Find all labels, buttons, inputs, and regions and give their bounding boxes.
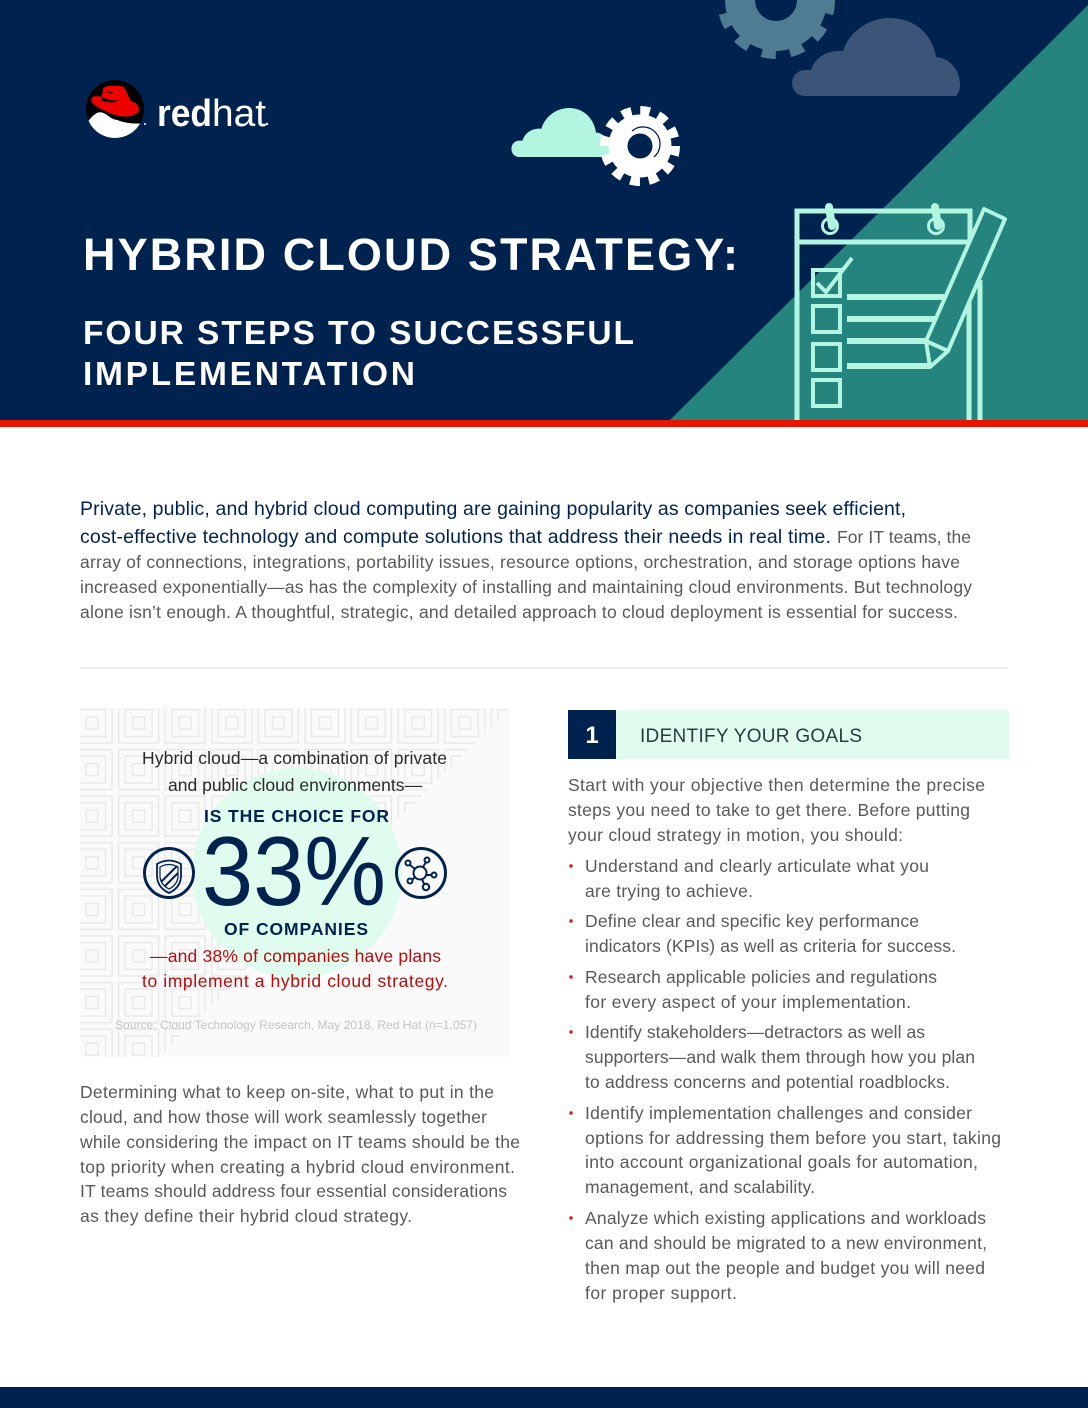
title: HYBRID CLOUD STRATEGY: xyxy=(83,229,738,280)
step 1 bullet list: for proper support. xyxy=(585,1283,737,1303)
header panel xyxy=(0,0,1088,427)
step 1 bullet list: then map out the people and budget you will need xyxy=(585,1258,985,1278)
big number: 33% xyxy=(202,816,386,926)
step 1 bullet list: management, and scalability. xyxy=(585,1177,815,1197)
logo: Red Hat xyxy=(83,80,268,143)
subtitle: IMPLEMENTATION xyxy=(83,356,415,393)
stat label bottom: OF COMPANIES xyxy=(224,919,368,939)
step 1 bullet list: Research applicable policies and regulations xyxy=(585,967,937,987)
red stat text: —and 38% of companies have plans xyxy=(150,946,441,966)
text: left column paragraph: Determining what to keep on-site, what to put in the xyxy=(80,1082,494,1102)
intro paragraph: array of connections, integrations, portability issues, resource options, orchestration, and storage options have xyxy=(80,552,960,572)
red stat text: to implement a hybrid cloud strategy. xyxy=(142,971,448,991)
step 1 bullet list: to address concerns and potential roadblocks. xyxy=(585,1072,950,1092)
panel: 33% statistic xyxy=(80,708,510,1057)
intro paragraph: Private, public, and hybrid cloud computing are gaining popularity as companies seek efficient, xyxy=(80,498,906,520)
step 1 bullet list: Identify implementation challenges and consider xyxy=(585,1103,972,1123)
intro paragraph xyxy=(80,498,972,622)
text: left column paragraph: top priority when creating a hybrid cloud environment. xyxy=(80,1157,515,1177)
text: left column paragraph: as they define their hybrid cloud strategy. xyxy=(80,1206,412,1226)
step 1 bullet list: into account organizational goals for automation, xyxy=(585,1152,978,1172)
icon: shadowman xyxy=(86,80,144,138)
step 1 intro text: steps you need to take to get there. Before putting xyxy=(568,800,970,820)
step 1 bullet list: Define clear and specific key performance xyxy=(585,911,919,931)
teal diagonal triangle xyxy=(670,5,1088,420)
intro paragraph: increased exponentially—as has the complexity of installing and maintaining cloud environments. But technology xyxy=(80,577,972,597)
step 1 bullet list xyxy=(569,856,1001,1303)
icon: white gear xyxy=(606,112,674,180)
text: left column paragraph: while considering the impact on IT teams should be the xyxy=(79,1132,520,1152)
step 1 bullet list: supporters—and walk them through how you plan xyxy=(585,1047,975,1067)
icon: faded gear xyxy=(726,0,826,50)
intro paragraph: For IT teams, the xyxy=(837,527,971,547)
step 1 heading: 1 xyxy=(585,722,599,749)
step 1 intro text xyxy=(568,775,985,845)
text: left column paragraph: cloud, and how those will work seamlessly together xyxy=(80,1107,487,1127)
icon: mint cloud xyxy=(511,108,610,157)
mint circle xyxy=(192,768,402,978)
stat lead-in text: Hybrid cloud—a combination of private xyxy=(142,748,447,768)
stat label top: IS THE CHOICE FOR xyxy=(204,806,389,826)
step 1 bullet list: Identify stakeholders—detractors as well as xyxy=(585,1022,925,1042)
footer bar xyxy=(0,1387,1088,1408)
step 1 intro text: Start with your objective then determine the precise xyxy=(568,775,985,795)
source: Source: Cloud Technology Research, May 2018, Red Hat (n=1,057) xyxy=(115,1018,477,1032)
text: left column paragraph xyxy=(79,1082,520,1226)
icon: checklist with pencil xyxy=(797,207,1005,420)
step 1 heading: IDENTIFY YOUR GOALS xyxy=(640,726,862,747)
step 1 bullet list: Analyze which existing applications and workloads xyxy=(585,1208,986,1228)
subtitle xyxy=(83,315,634,393)
icon: network hub xyxy=(396,848,446,898)
step 1 bullet list: options for addressing them before you start, taking xyxy=(585,1128,1001,1148)
intro paragraph: cost-effective technology and compute solutions that address their needs in real time. xyxy=(80,526,831,548)
icon: shield xyxy=(144,848,194,898)
intro paragraph: alone isn’t enough. A thoughtful, strategic, and detailed approach to cloud deployment is essential for success. xyxy=(80,602,958,622)
step 1 heading xyxy=(568,710,1009,759)
step 1 intro text: your cloud strategy in motion, you should: xyxy=(568,825,903,845)
icon: faded cloud xyxy=(792,18,960,96)
logo: Red Hat: hat xyxy=(212,93,266,135)
red stat text xyxy=(142,946,448,991)
red header rule xyxy=(0,420,1088,427)
step 1 bullet list: for every aspect of your implementation. xyxy=(585,992,911,1012)
step 1 bullet list: indicators (KPIs) as well as criteria for success. xyxy=(585,936,956,956)
stat lead-in text: and public cloud environments— xyxy=(168,775,422,795)
logo wordmark: red xyxy=(157,93,212,135)
step 1 bullet list: are trying to achieve. xyxy=(585,881,753,901)
step 1 bullet list: can and should be migrated to a new environment, xyxy=(585,1233,987,1253)
subtitle: FOUR STEPS TO SUCCESSFUL xyxy=(83,315,634,352)
step 1 bullet list: Understand and clearly articulate what you xyxy=(585,856,929,876)
stat lead-in text xyxy=(142,748,447,795)
text: left column paragraph: IT teams should address four essential considerations xyxy=(80,1181,507,1201)
